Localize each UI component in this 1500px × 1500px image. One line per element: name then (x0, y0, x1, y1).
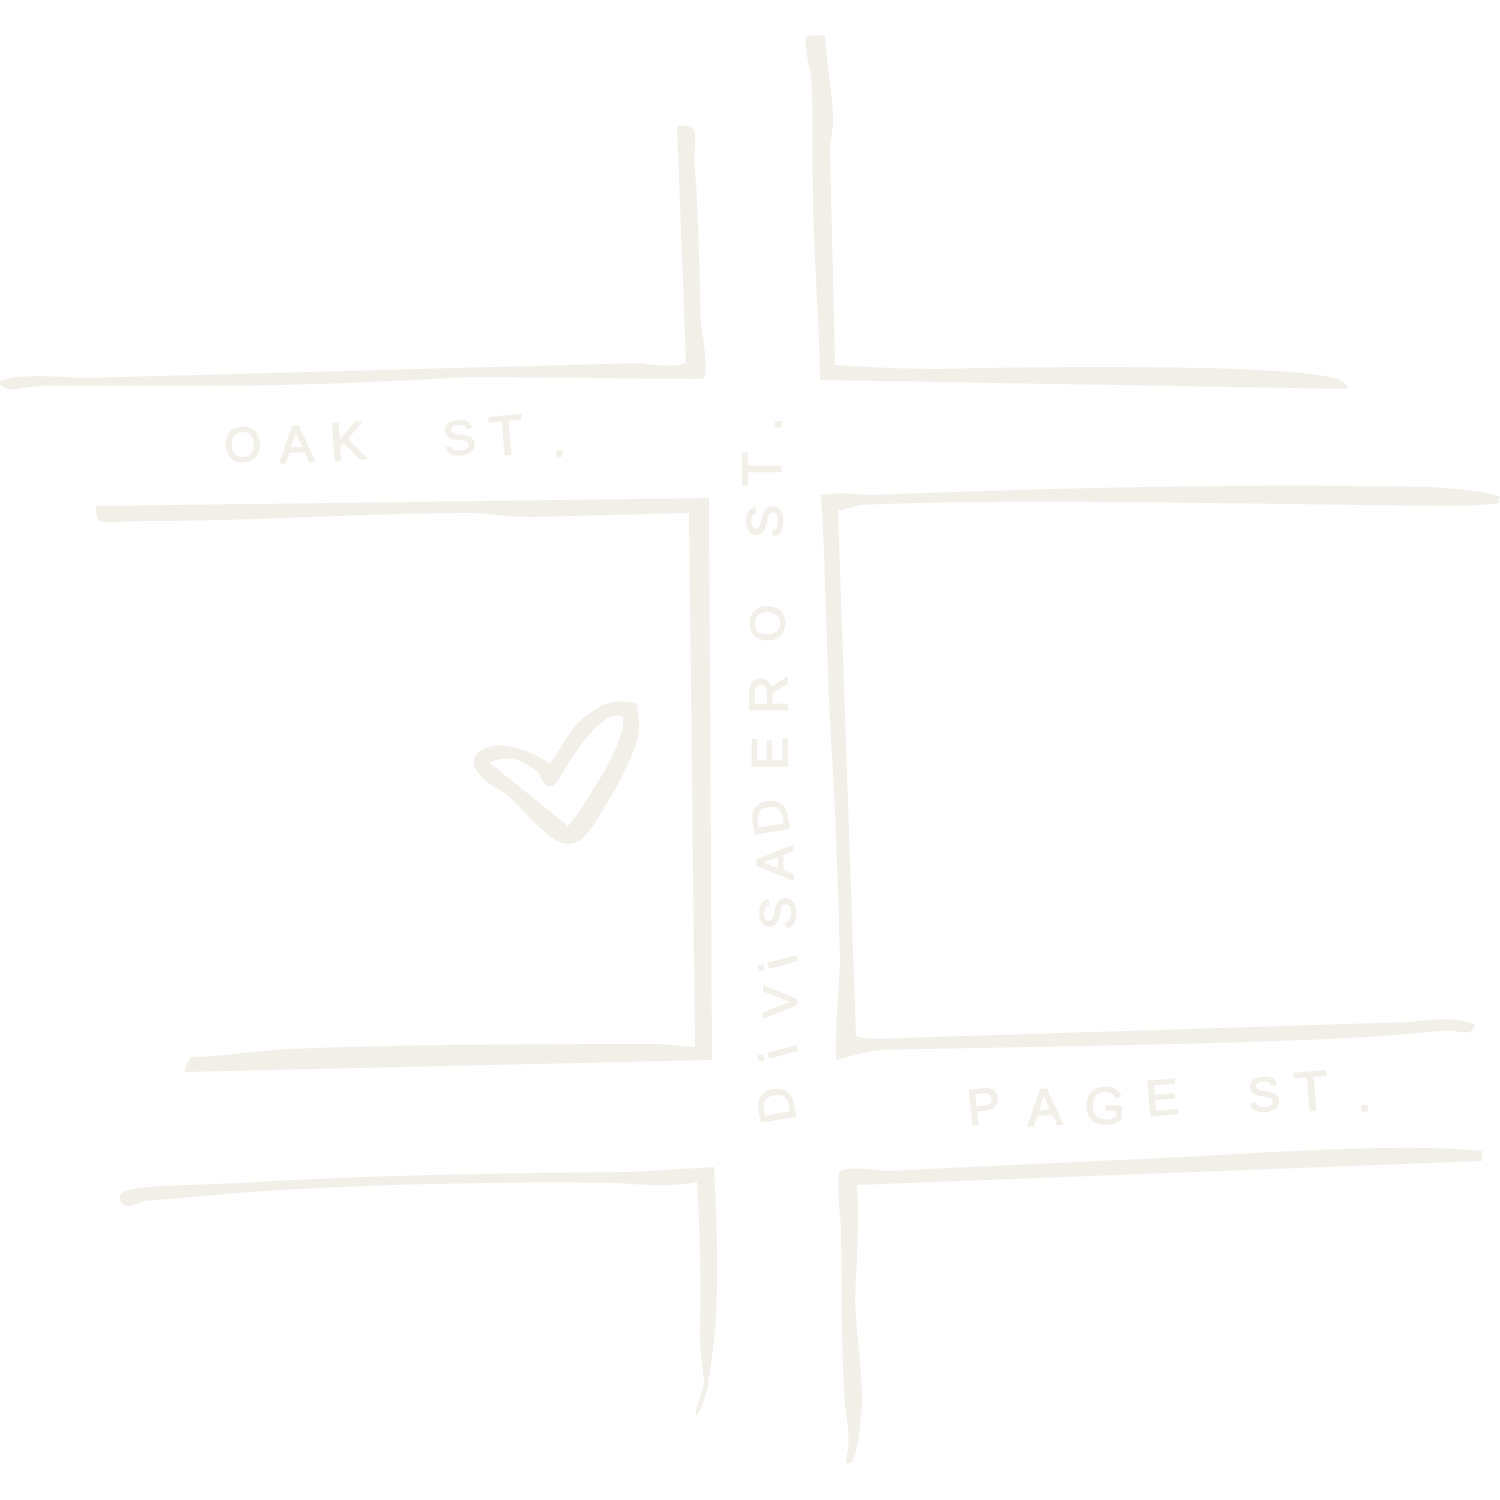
label: Oak St.: O (223, 418, 263, 473)
label: Divisadero St.: i (749, 949, 810, 976)
label: Oak St.: . (553, 414, 566, 467)
label: Oak St.: T (487, 402, 526, 468)
label: Divisadero St.: E (742, 737, 798, 770)
label: Divisadero St.: i (749, 1039, 810, 1066)
label: Divisadero St.: O (742, 605, 795, 642)
road edge: top-left block corner (0, 126, 706, 389)
label: Divisadero St.: R (739, 675, 799, 714)
label: Divisadero St.: S (737, 505, 793, 538)
road edge: top-right block corner (806, 35, 1348, 389)
icon: heart marker (474, 702, 639, 844)
label: Page St.: . (1358, 1069, 1371, 1122)
road edge: middle-left block (96, 498, 712, 1072)
label: Divisadero St.: A (747, 845, 805, 880)
label: Page St.: E (1143, 1068, 1181, 1127)
label: Divisadero St.: . (739, 418, 792, 431)
label: Divisadero St.: V (755, 986, 808, 1018)
label: Oak St.: K (328, 411, 368, 473)
label: Divisadero St.: D (745, 1083, 807, 1128)
label: Divisadero St.: D (739, 795, 801, 840)
road edge: bottom-right block corner (838, 1148, 1482, 1463)
label: Page St.: G (1084, 1077, 1126, 1136)
label: Page St.: A (1026, 1078, 1064, 1138)
label: Page St.: T (1292, 1058, 1331, 1124)
road edge: bottom-left block corner (120, 1167, 717, 1416)
label: Oak St.: A (278, 415, 316, 475)
label: Page St.: S (1246, 1068, 1282, 1123)
label: Divisadero St.: S (750, 897, 806, 930)
road edge: middle-right block (821, 486, 1500, 1060)
label: Divisadero St.: T (730, 452, 793, 486)
label: Page St.: P (964, 1077, 1003, 1136)
label: Oak St.: S (441, 411, 478, 467)
